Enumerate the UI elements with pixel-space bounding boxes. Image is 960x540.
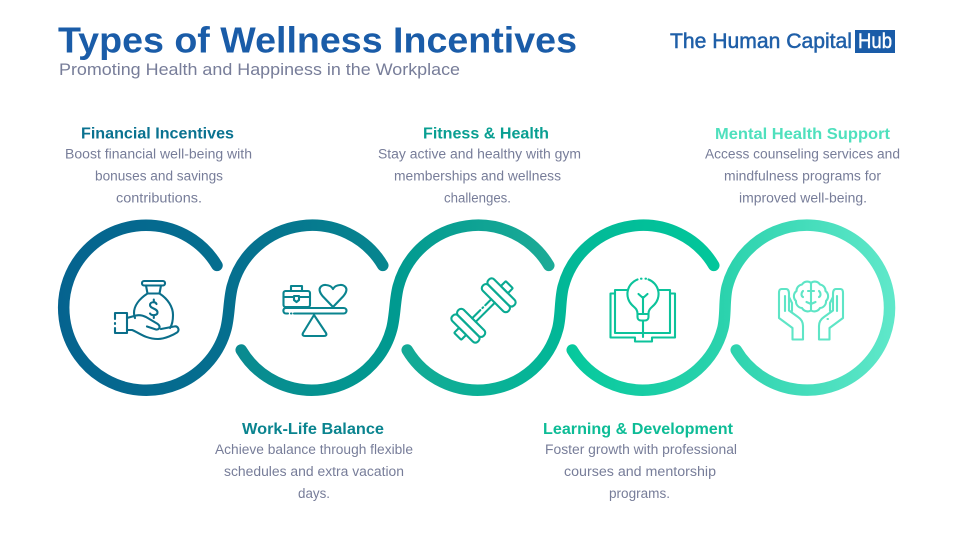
panel: work-life balance: Achieve balance through flexible <box>215 442 413 457</box>
icon: brain held by hands <box>779 282 843 340</box>
subtitle: Promoting Health and Happiness in the Workplace <box>59 60 460 79</box>
panel: mental health support: Access counseling services and <box>705 146 900 161</box>
logo: Hub <box>858 30 892 53</box>
panel: mental health support <box>705 126 900 206</box>
panel: work-life balance <box>215 421 413 501</box>
panel: fitness and health: challenges. <box>444 190 511 206</box>
panel: financial incentives: contributions. <box>116 190 202 206</box>
panel: work-life balance: Work-Life Balance <box>242 421 384 438</box>
icon: work-life balance scale <box>283 285 346 336</box>
linked ring chain <box>64 225 890 390</box>
icon: open book with light bulb <box>610 279 675 342</box>
title: Types of Wellness Incentives <box>58 20 577 61</box>
panel: mental health support: improved well-being. <box>739 190 867 206</box>
panel: learning and development <box>543 421 737 501</box>
panel: learning and development: courses and mentorship <box>564 464 716 479</box>
panel: fitness and health: Fitness & Health <box>423 125 549 142</box>
icon: money bag in hand <box>115 281 178 339</box>
panel: financial incentives: bonuses and savings <box>95 168 223 184</box>
logo: The Human Capital <box>670 30 852 53</box>
panel: learning and development: Learning & Development <box>543 421 734 438</box>
panel: mental health support: mindfulness programs for <box>724 168 882 184</box>
panel: financial incentives: Boost financial well-being with <box>65 146 252 161</box>
panel: mental health support: Mental Health Support <box>715 126 891 143</box>
panel: fitness and health: Stay active and healthy with gym <box>378 146 581 161</box>
panel: fitness and health: memberships and wellness <box>394 168 561 184</box>
icon: dumbbell <box>445 272 522 349</box>
panel: learning and development: Foster growth with professional <box>545 442 737 457</box>
panel: work-life balance: days. <box>298 486 330 501</box>
panel: learning and development: programs. <box>609 486 670 501</box>
panel: fitness and health <box>378 125 581 206</box>
panel: work-life balance: schedules and extra vacation <box>224 464 404 479</box>
panel: financial incentives: Financial Incentives <box>81 125 234 142</box>
panel: financial incentives <box>65 125 252 206</box>
